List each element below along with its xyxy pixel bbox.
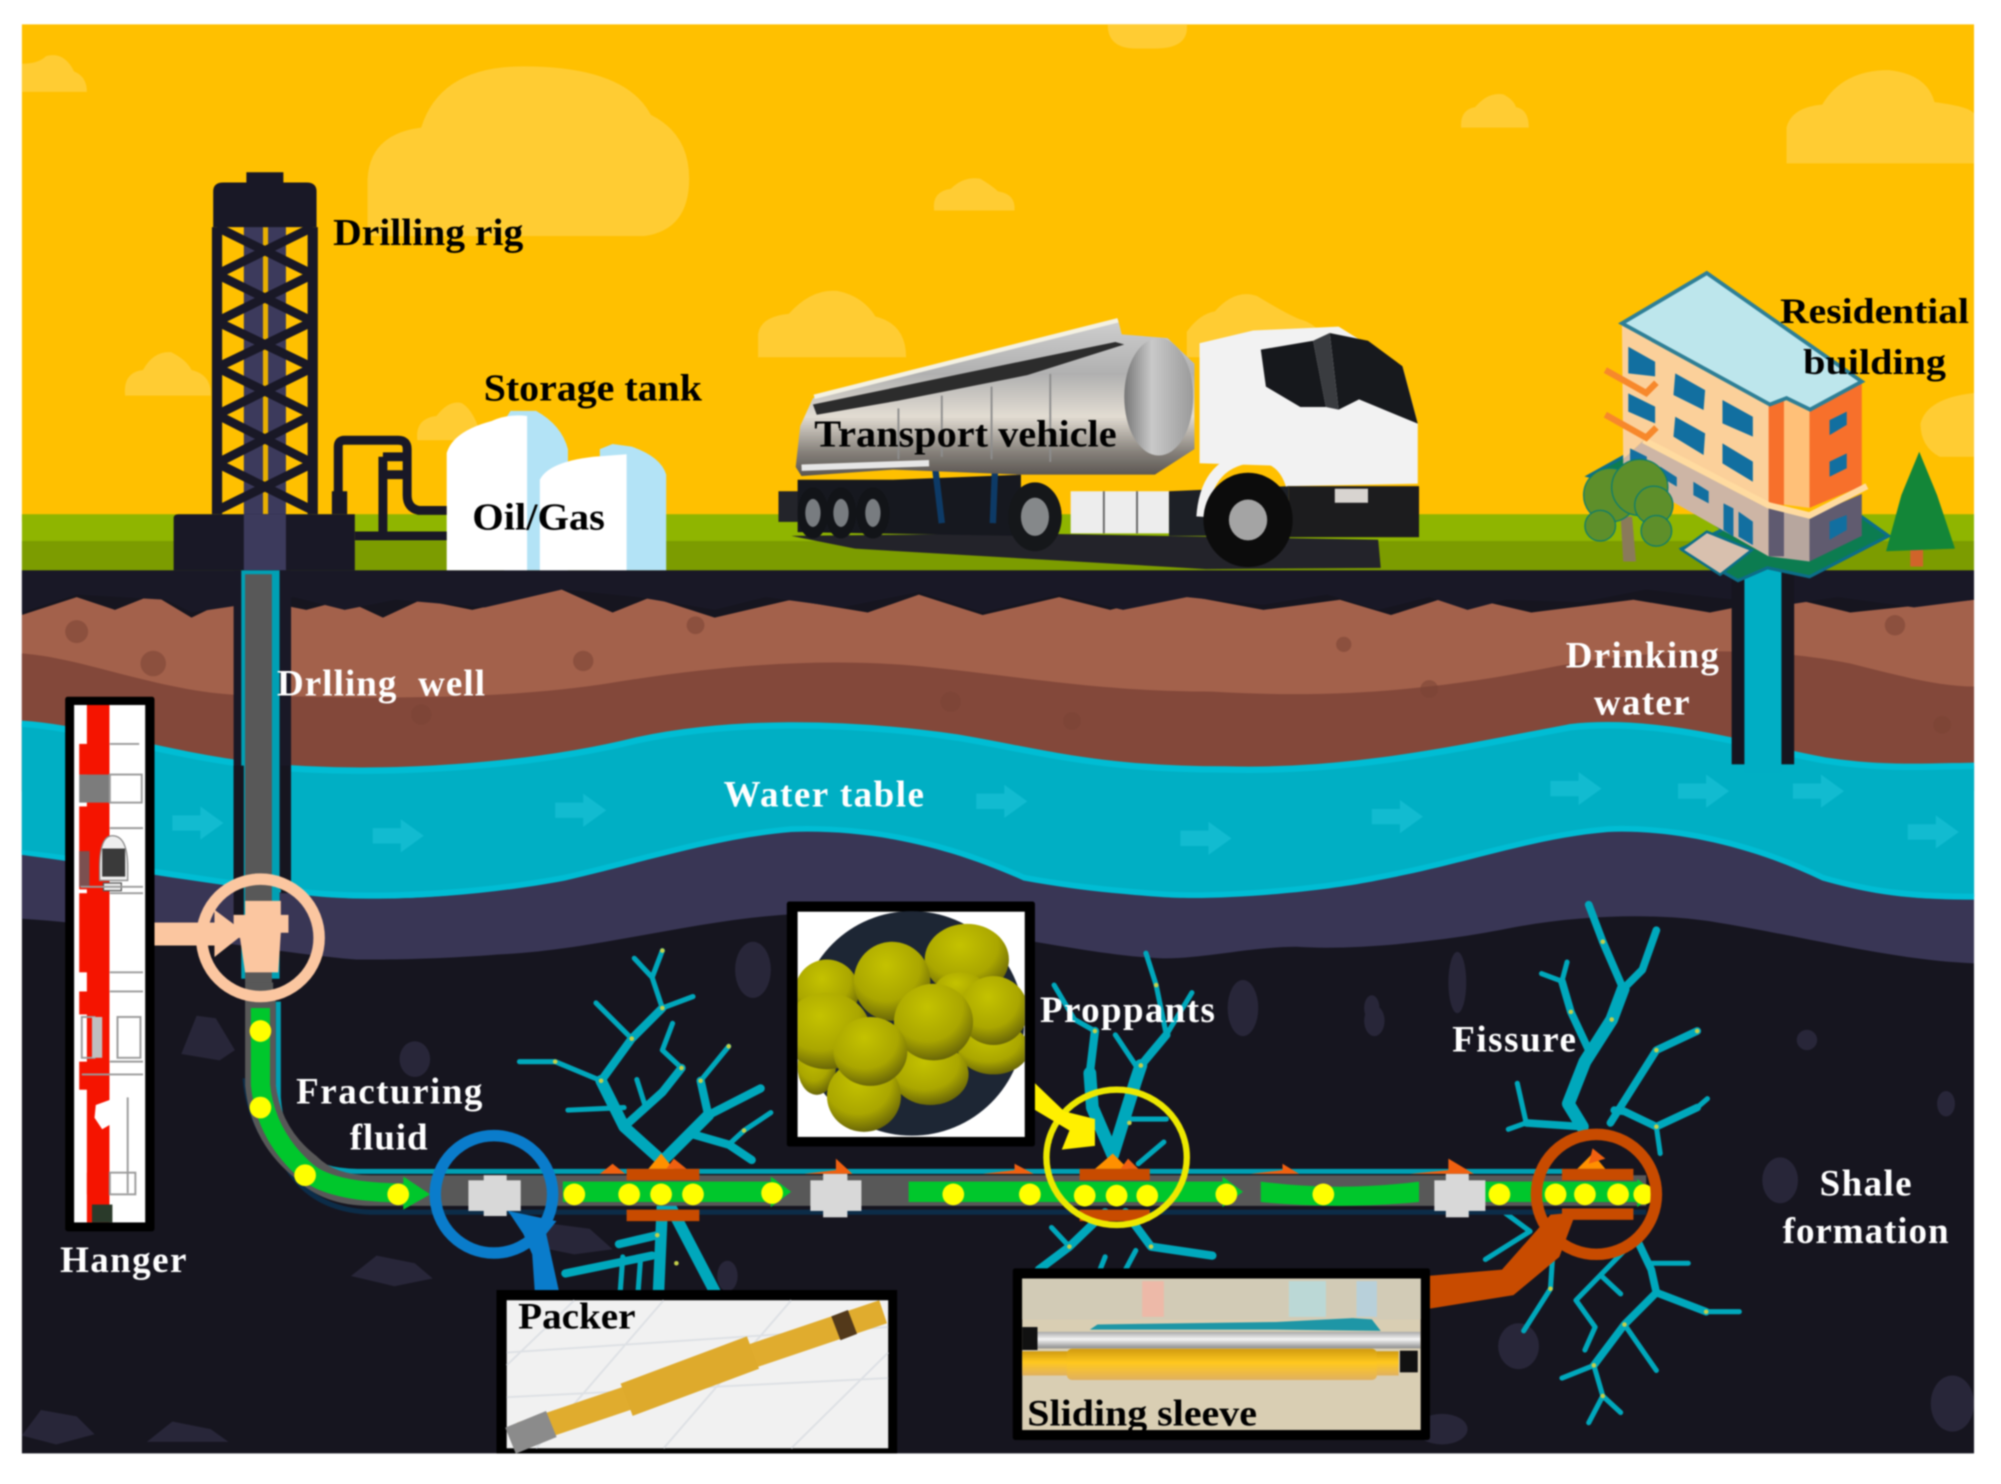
label: shale formation [1783, 1164, 1949, 1252]
label: shale formation: Shale [1820, 1164, 1912, 1205]
packer joints [468, 1174, 1485, 1217]
label: drinking water: water [1594, 683, 1690, 724]
label: fissure: Fissure [1452, 1019, 1576, 1060]
label: oil gas: Oil/Gas [472, 497, 605, 539]
label: drinking water [1566, 635, 1719, 724]
packer panel [496, 1290, 897, 1455]
sliding sleeve callout [1427, 1134, 1656, 1309]
clouds [22, 24, 1974, 457]
proppant panel [784, 902, 1035, 1146]
trees [1584, 452, 1955, 567]
drinking water pipe [1732, 561, 1794, 772]
label: proppants: Proppants [1040, 990, 1215, 1031]
label: fracturing fluid: fluid [350, 1118, 428, 1159]
sliding sleeve panel [1013, 1268, 1430, 1440]
water table [13, 723, 1991, 897]
dark rock blobs [22, 942, 1974, 1444]
orange sleeves and flow arrows [600, 1148, 1633, 1221]
label: drinking water: Drinking [1566, 635, 1719, 676]
hanger panel [65, 697, 155, 1231]
fissure: centre [1039, 953, 1212, 1270]
horizontal wellbore [245, 983, 1646, 1212]
label: drilling well: Drlling well [277, 663, 485, 704]
label: drilling rig: Drilling rig [333, 212, 523, 254]
storage tanks [447, 411, 666, 570]
dark surface band edge [22, 570, 1974, 612]
label: fracturing fluid [296, 1072, 483, 1159]
label: residential building: building [1803, 342, 1946, 382]
proppant dots [250, 1020, 1654, 1206]
label: water table: Water table [724, 774, 924, 815]
label: fracturing fluid: Fracturing [296, 1072, 483, 1113]
label: transport vehicle: Transport vehicle [814, 414, 1117, 456]
purple rock band [22, 832, 1974, 963]
label: hanger: Hanger [60, 1240, 186, 1281]
packer callout [435, 1136, 559, 1291]
label: residential building [1780, 291, 1969, 382]
fissure: left [519, 948, 771, 1291]
drilling well [234, 570, 291, 983]
sky [22, 24, 1974, 522]
soil layers [22, 570, 1974, 1455]
hanger callout [155, 879, 319, 997]
soil specks [65, 615, 1906, 688]
tanker truck [778, 319, 1419, 569]
rig pipework [338, 440, 447, 536]
label: storage tank: Storage tank [484, 368, 703, 410]
drilling rig [174, 172, 355, 570]
label: packer: Packer [518, 1296, 636, 1337]
fissure: right [1485, 905, 1739, 1423]
ground grass [22, 514, 1974, 570]
label: sliding sleeve: Sliding sleeve [1027, 1393, 1257, 1434]
proppants callout [1013, 1082, 1187, 1225]
label: residential building: Residential [1780, 291, 1969, 331]
fracturing fluid [260, 1008, 1656, 1210]
residential building [1589, 273, 1889, 581]
label: shale formation: formation [1783, 1211, 1949, 1252]
